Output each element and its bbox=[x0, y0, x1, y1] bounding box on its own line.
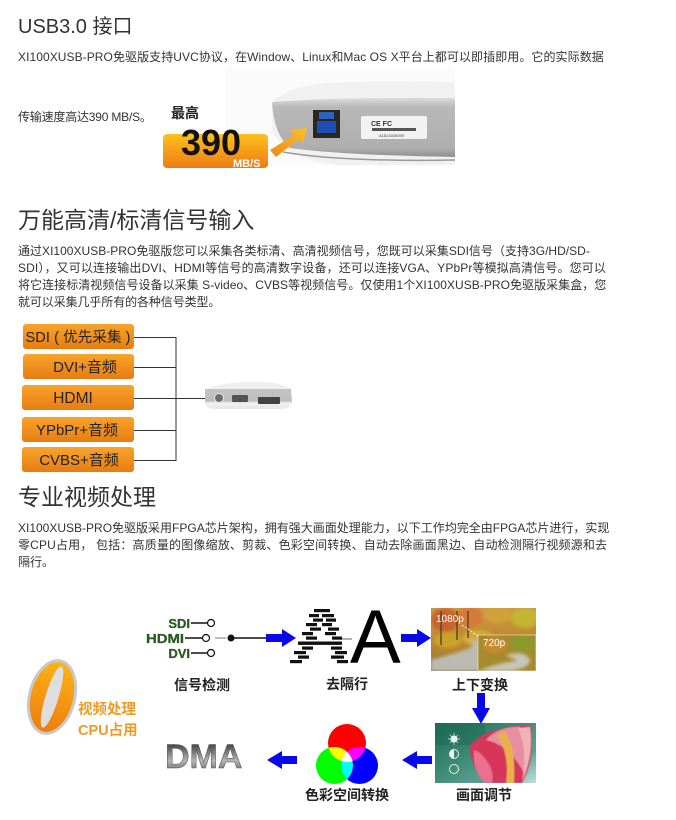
text: USB3.0 description line 2: 传输速度高达390 MB/S。 bbox=[18, 110, 152, 124]
image: 390 MB/S device photo bbox=[163, 68, 455, 170]
arrow: to deinterlace bbox=[266, 629, 296, 647]
image: 390 MB/S device photo: MB/S bbox=[233, 158, 260, 170]
text: video processing description: 隔行。 bbox=[18, 555, 54, 569]
input: SDI: SDI ( 优先采集 ) bbox=[26, 329, 130, 346]
arrow: to scaling bbox=[401, 629, 431, 647]
icon: zero CPU: CPU占用 bbox=[78, 722, 138, 739]
text: USB3.0 description line 1: XI100XUSB-PRO免驱版支持UVC协议，在Window、Linux和Mac OS X平台上都可以即插即用。它的实际数据 bbox=[18, 50, 604, 64]
arrow: to DMA bbox=[267, 751, 297, 769]
certification label bbox=[361, 116, 427, 139]
step: colour space conversion: 色彩空间转换 bbox=[305, 787, 389, 803]
step: picture adjustment bbox=[435, 723, 536, 803]
step: up/down conversion: 720p bbox=[483, 638, 506, 649]
speed badge bbox=[163, 134, 268, 168]
input: CVBS: CVBS+音频 bbox=[39, 452, 119, 469]
step: signal detection: 信号检测 bbox=[174, 677, 230, 693]
USB port bbox=[313, 110, 340, 138]
interlaced letter A bbox=[290, 609, 348, 663]
step: deinterlace bbox=[290, 595, 401, 692]
step: deinterlace: A bbox=[350, 595, 401, 680]
image: 390 MB/S device photo: 390 bbox=[181, 122, 241, 163]
step: DMA: DMA bbox=[165, 738, 242, 776]
step: signal detection bbox=[146, 616, 268, 693]
heading: signal input: 万能高清/标清信号输入 bbox=[18, 207, 254, 233]
step: up/down conversion: 1080p bbox=[436, 614, 464, 625]
input: DVI: DVI+音频 bbox=[53, 359, 117, 376]
step: up/down conversion bbox=[431, 607, 539, 693]
step: deinterlace: 去隔行 bbox=[326, 676, 368, 692]
diagram: video processing bbox=[21, 595, 539, 803]
text: signal input description bbox=[18, 244, 606, 309]
icon: zero CPU: 视频处理 bbox=[78, 700, 136, 718]
device body bbox=[272, 81, 455, 165]
tulip bbox=[470, 726, 532, 783]
diagram: signal inputs bbox=[22, 324, 292, 472]
text: video processing description: XI100XUSB-PRO免驱版采用FPGA芯片架构，拥有强大画面处理能力，以下工作均完全由FPGA芯片进行，实现 bbox=[18, 521, 609, 535]
text: video processing description bbox=[18, 521, 609, 569]
text: signal input description: 将它连接标清视频信号设备以采集 S-video、CVBS等视频信号。仅使用1个XI100XUSB-PRO免驱版采集盒，您 bbox=[18, 278, 606, 292]
icon: zero CPU bbox=[21, 656, 138, 739]
inset 720p image bbox=[478, 635, 536, 671]
text: signal input description: 通过XI100XUSB-PRO免驱版您可以采集各类标清、高清视频信号，您既可以采集SDI信号（支持3G/HD/SD- bbox=[18, 244, 590, 258]
connector lines bbox=[133, 338, 205, 460]
capture device bbox=[205, 382, 292, 409]
step: up/down conversion: 上下变换 bbox=[452, 677, 508, 693]
input: HDMI: HDMI bbox=[53, 390, 93, 407]
image: 390 MB/S device photo: CE FC bbox=[371, 121, 392, 128]
heading: video processing: 专业视频处理 bbox=[18, 484, 156, 510]
text: signal input description: 就可以采集几乎所有的各种信号类型。 bbox=[18, 295, 220, 309]
text: signal input description: SDI），又可以连接输出DVI、HDMI等信号的高清数字设备，还可以连接VGA、YPbPr等模拟高清信号。您可以 bbox=[18, 261, 606, 275]
arrow: down to picture adjust bbox=[472, 693, 490, 724]
orange arrow bbox=[270, 128, 307, 157]
input: YPbPr bbox=[22, 417, 134, 442]
input: HDMI bbox=[22, 385, 134, 410]
step: picture adjustment: 画面调节 bbox=[456, 787, 512, 803]
text: video processing description: 零CPU占用， 包括：高质量的图像缩放、剪裁、色彩空间转换、自动去除画面黑边、自动检测隔行视频源和去 bbox=[18, 538, 607, 552]
image: 390 MB/S device photo: 最高 bbox=[171, 105, 199, 121]
input: SDI bbox=[23, 324, 134, 349]
arrow: to colour space bbox=[402, 751, 432, 769]
input: DVI bbox=[23, 354, 134, 379]
step: colour space conversion bbox=[305, 724, 389, 803]
input: YPbPr: YPbPr+音频 bbox=[36, 422, 118, 439]
bottom shadow bbox=[283, 152, 455, 160]
device back panel bbox=[272, 98, 455, 157]
heading: USB3.0: USB3.0 接口 bbox=[18, 16, 132, 38]
input: CVBS bbox=[22, 447, 134, 472]
step: signal detection: DVI bbox=[168, 646, 190, 661]
step: signal detection: SDI bbox=[168, 616, 190, 631]
image: 390 MB/S device photo: A1813030059 bbox=[379, 133, 405, 138]
step: signal detection: HDMI bbox=[146, 631, 184, 646]
